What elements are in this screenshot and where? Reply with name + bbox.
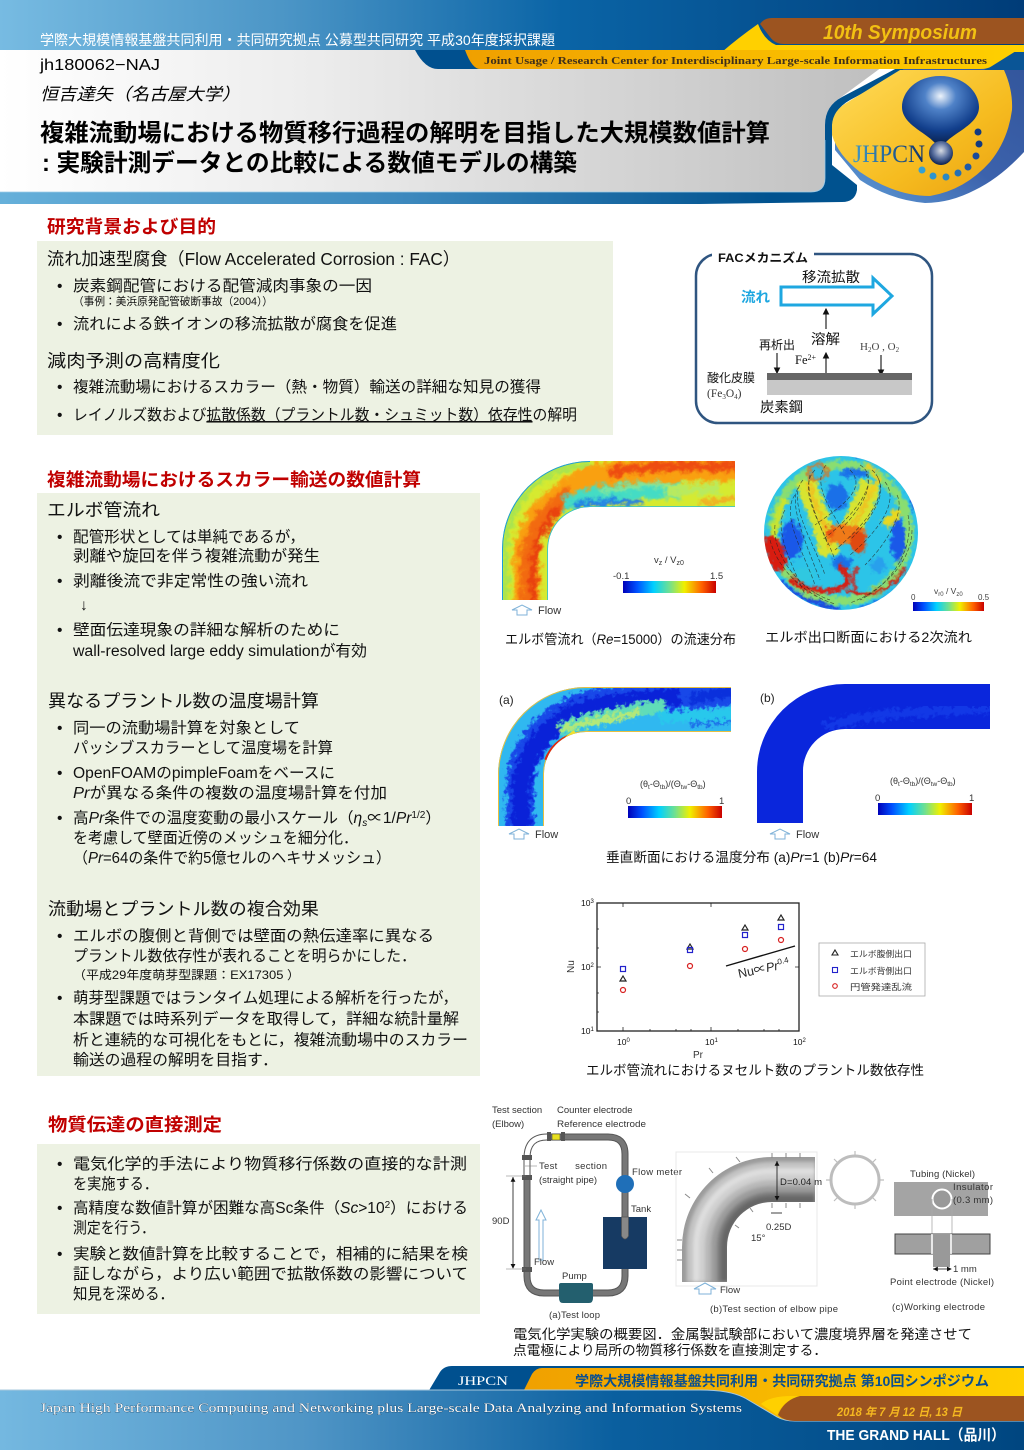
orange center bbox=[824, 524, 866, 544]
x axis labels: 10 bbox=[617, 1037, 626, 1047]
arrow: flow bbox=[781, 278, 892, 314]
Prandtl bullets bbox=[57, 718, 441, 867]
y axis labels: 2 bbox=[590, 963, 594, 969]
colorbar minimum: 0 bbox=[911, 593, 916, 602]
flanges bbox=[522, 1132, 565, 1272]
x axis title: Pr bbox=[693, 1050, 704, 1061]
dimension arrow bbox=[512, 1177, 514, 1268]
FAC bullets: （事例：美浜原発配管破断事故（2004）） bbox=[73, 294, 273, 308]
Prandtl bullets: ） bbox=[425, 810, 441, 827]
flow label: 流れ bbox=[741, 289, 770, 305]
y axis labels: 10 bbox=[581, 962, 590, 972]
Prandtl bullets: （Pr=64の条件で約5億セルのヘキサメッシュ） bbox=[73, 849, 391, 867]
y axis labels: 3 bbox=[590, 899, 594, 905]
dissolution label: 溶解 bbox=[811, 331, 840, 347]
subheading: combined effect: 流動場とプラントル数の複合効果 bbox=[48, 899, 319, 919]
flow label: Flow bbox=[720, 1285, 740, 1296]
combined effect bullets: エルボの腹側と背側では壁面の熱伝達率に異なる bbox=[73, 927, 434, 945]
subheading: FAC: 流れ加速型腐食（Flow Accelerated Corrosion : FAC） bbox=[47, 249, 460, 269]
FAC mechanism diagram bbox=[696, 248, 932, 423]
prediction bullets bbox=[57, 378, 577, 424]
FAC bullets: • bbox=[57, 316, 62, 333]
oxygen label: H bbox=[860, 341, 868, 353]
arrow: reprecipitation down bbox=[776, 353, 778, 373]
FAC bullets: 流れによる鉄イオンの移流拡散が腐食を促進 bbox=[73, 315, 397, 333]
legend triangle row: エルボ腹側出口 bbox=[850, 949, 912, 959]
combined effect bullets: 析と連続的な可視化をもとに，複雑流動場中のスカラー bbox=[73, 1031, 468, 1049]
tank inlet bbox=[622, 1217, 628, 1239]
mass transfer bullets: • bbox=[57, 1200, 62, 1217]
elbow bullets: • bbox=[57, 573, 62, 590]
scatter chart: Nu vs Pr bbox=[566, 898, 806, 1061]
mass transfer bullets: 電気化学的手法により物質移行係数の直接的な計測 bbox=[73, 1155, 467, 1173]
colorbar title: / V bbox=[662, 555, 677, 566]
diameter arrow bbox=[776, 1161, 778, 1200]
colorbar title: -Θ bbox=[900, 776, 910, 786]
pump bbox=[559, 1283, 593, 1303]
diameter label: D=0.04 m bbox=[780, 1177, 822, 1188]
venue: THE GRAND HALL（品川） bbox=[827, 1427, 1005, 1444]
y axis labels: 1 bbox=[590, 1027, 594, 1033]
rig labels: (straight pipe) bbox=[539, 1175, 597, 1186]
ribbon JHPCN: JHPCN bbox=[458, 1373, 509, 1388]
mass transfer bullets: 証しながら，より広い範囲で拡散係数の影響について bbox=[73, 1265, 468, 1283]
footer band bbox=[0, 1390, 1024, 1450]
velocity vectors bbox=[770, 465, 912, 604]
elbow bullets: ↓ bbox=[80, 597, 88, 614]
symposium label: 10th Symposium bbox=[823, 22, 977, 44]
carbon steel bbox=[767, 380, 912, 395]
y axis labels: 10 bbox=[581, 898, 590, 908]
temperature elbow b bbox=[757, 684, 990, 823]
legend square row: エルボ背側出口 bbox=[850, 966, 912, 976]
y axis labels: 10 bbox=[581, 1026, 590, 1036]
colorbar title: ) bbox=[703, 779, 706, 789]
heading: background and aim: 研究背景および目的 bbox=[47, 217, 216, 237]
prediction bullets: 複雑流動場におけるスカラー（熱・物質）輸送の詳細な知見の獲得 bbox=[73, 378, 541, 396]
rig labels: Counter electrode bbox=[557, 1105, 633, 1116]
elbow bullets: 壁面伝達現象の詳細な解析のために bbox=[73, 621, 340, 639]
flow arrow label: Flow bbox=[796, 829, 819, 841]
logo drop bbox=[902, 76, 979, 143]
electrode labels: Point electrode (Nickel) bbox=[890, 1277, 994, 1288]
combined effect bullets: （平成29年度萌芽型課題：EX17305 ） bbox=[73, 968, 300, 982]
flow meter bbox=[616, 1175, 634, 1193]
oxide label: 酸化皮膜 bbox=[707, 371, 755, 385]
mass transfer bullets: ）における bbox=[390, 1199, 468, 1217]
dimension extension lines bbox=[506, 1166, 537, 1269]
temperature caption: 垂直断面における温度分布 (a)Pr=1 (b)Pr=64 bbox=[606, 850, 877, 865]
colorbar title: tb bbox=[910, 781, 916, 788]
tank bbox=[603, 1217, 647, 1269]
footer date tab bbox=[761, 1396, 1024, 1421]
mass transfer bullets: 知見を深める． bbox=[73, 1285, 174, 1303]
project id: jh180062−NAJ bbox=[39, 57, 160, 74]
colorbar title: tb bbox=[947, 781, 953, 788]
tick marks bbox=[597, 903, 799, 1031]
section view bbox=[895, 1234, 990, 1254]
elbow bullets: 配管形状としては単純であるが， bbox=[73, 528, 305, 546]
flow arrow bbox=[694, 1283, 716, 1294]
square series bbox=[620, 924, 784, 972]
colorbar title: t bbox=[648, 784, 650, 791]
title: 複雑流動場における物質移行過程の解明を目指した大規模数値計算 bbox=[40, 120, 770, 147]
colorbar title: z0 bbox=[677, 560, 684, 567]
rig labels: Test section bbox=[539, 1161, 607, 1172]
panel: mass transfer bbox=[37, 1144, 480, 1314]
steel label: 炭素鋼 bbox=[760, 399, 803, 415]
secondary flow disc bbox=[764, 456, 918, 610]
triangle series bbox=[620, 915, 784, 981]
Prandtl bullets: 1/2 bbox=[411, 810, 426, 821]
Prandtl bullets: ∝1/ bbox=[367, 810, 397, 827]
width arrow bbox=[933, 1268, 951, 1270]
colorbar: temperature a bbox=[626, 779, 724, 818]
colorbar title: -Θ bbox=[650, 779, 660, 789]
mass transfer bullets: • bbox=[57, 1246, 62, 1263]
spacing arrow bbox=[771, 1212, 782, 1214]
y axis title: Nu bbox=[566, 960, 577, 973]
Prandtl bullets: 高Pr条件での温度変動の最小スケール（η bbox=[73, 810, 362, 827]
colorbar title: tb bbox=[660, 784, 666, 791]
date: 2018 年 7 月 12 日, 13 日 bbox=[836, 1406, 963, 1419]
circle series bbox=[620, 938, 784, 992]
experiment caption: 電気化学実験の概要図．金属製試験部において濃度境界層を発達させて bbox=[513, 1327, 972, 1342]
working electrode diagram bbox=[890, 1169, 994, 1313]
elbow test section bbox=[527, 1137, 547, 1178]
elbow bullets bbox=[57, 528, 367, 660]
elbow pipe shading bbox=[682, 1157, 815, 1282]
mass transfer bullets: 測定を行う． bbox=[73, 1219, 155, 1237]
colorbar maximum: 1.5 bbox=[710, 571, 723, 582]
x axis labels bbox=[617, 1037, 806, 1047]
electrode labels: (0.3 mm) bbox=[953, 1195, 993, 1206]
colorbar maximum: 1 bbox=[719, 796, 724, 807]
mass transfer bullets: 2 bbox=[385, 1200, 391, 1211]
chart legend bbox=[819, 943, 925, 996]
flow arrow label: Flow bbox=[535, 829, 558, 841]
author: 恒吉達矢（名古屋大学） bbox=[40, 85, 240, 104]
y axis labels bbox=[581, 898, 594, 1036]
arrow: oxygen down bbox=[880, 355, 882, 375]
insulator circle bbox=[932, 1190, 952, 1208]
velocity caption: エルボ管流れ（Re=15000）の流速分布 bbox=[505, 632, 736, 647]
prediction bullets: レイノルズ数および拡散係数（プラントル数・シュミット数）依存性の解明 bbox=[73, 406, 577, 424]
spacing label: 0.25D bbox=[766, 1222, 791, 1233]
heading: scalar transport: 複雑流動場におけるスカラー輸送の数値計算 bbox=[47, 469, 421, 490]
legend circle row: 円管発達乱流 bbox=[850, 982, 913, 992]
power law label: Nu∝Pr bbox=[737, 959, 780, 981]
power law label: 0.4 bbox=[777, 955, 790, 967]
x axis labels: 10 bbox=[705, 1037, 714, 1047]
flow arrow label: Flow bbox=[538, 605, 561, 617]
colorbar title: )/(Θ bbox=[665, 779, 681, 789]
logo panel bbox=[832, 68, 1024, 203]
colorbar title: )/(Θ bbox=[915, 776, 931, 786]
panel: numerical simulation bbox=[37, 493, 480, 1076]
combined effect bullets: 萌芽型課題ではランタイム処理による解析を行ったが， bbox=[73, 989, 458, 1007]
colorbar title: v bbox=[934, 586, 938, 596]
Prandtl bullets: Pr bbox=[396, 810, 412, 827]
joint usage ribbon bbox=[415, 46, 1024, 69]
advection label: 移流拡散 bbox=[802, 269, 860, 285]
header organisation line: 学際大規模情報基盤共同利用・共同研究拠点 公募型共同研究 平成30年度採択課題 bbox=[40, 32, 555, 48]
rig labels: Reference electrode bbox=[557, 1119, 646, 1130]
right blue corner bbox=[984, 44, 1024, 70]
yellow arms bbox=[806, 480, 830, 555]
Prandtl bullets: Prが異なる条件の複数の温度場計算を付加 bbox=[73, 783, 387, 802]
subheading: Prandtl: 異なるプラントル数の温度場計算 bbox=[48, 691, 319, 711]
rig labels: Test section bbox=[492, 1105, 542, 1116]
elbow test section diagram bbox=[672, 1150, 838, 1315]
experiment caption bbox=[513, 1327, 972, 1358]
secondary flow caption: エルボ出口断面における2次流れ bbox=[765, 630, 973, 645]
flow arrow 1 bbox=[512, 605, 561, 617]
green ring bbox=[773, 465, 909, 601]
iron ion label: 2+ bbox=[808, 353, 816, 362]
rig labels: Flow bbox=[534, 1257, 554, 1268]
flow arrow bbox=[536, 1210, 546, 1260]
experiment caption: 点電極により局所の物質移行係数を直接測定する． bbox=[513, 1343, 827, 1358]
elbow bullets: 剥離や旋回を伴う複雑流動が発生 bbox=[73, 547, 320, 565]
colorbar title: (θ bbox=[890, 776, 898, 786]
electrode labels bbox=[890, 1169, 994, 1313]
top right symposium tab bbox=[722, 18, 1024, 52]
formula label: ) bbox=[738, 388, 742, 400]
temperature elbow a bbox=[498, 687, 731, 826]
colorbar title: z0 bbox=[956, 592, 963, 598]
title bbox=[40, 120, 770, 177]
panel caption: (b)Test section of elbow pipe bbox=[710, 1304, 838, 1315]
electrode labels: 1 mm bbox=[953, 1264, 977, 1275]
subheading: elbow flow: エルボ管流れ bbox=[47, 500, 161, 520]
colorbar: temperature b bbox=[875, 776, 974, 815]
loop pipe bbox=[527, 1137, 625, 1293]
rig labels: 90D bbox=[492, 1216, 510, 1227]
colorbar: velocity bbox=[613, 555, 723, 593]
combined effect bullets: 輸送の過程の解明を目指す． bbox=[73, 1051, 278, 1069]
projection lines bbox=[932, 1199, 952, 1234]
header band bbox=[0, 0, 1024, 52]
Prandtl bullets: s bbox=[362, 818, 367, 829]
colorbar title: ) bbox=[953, 776, 956, 786]
colorbar title: z bbox=[659, 560, 663, 567]
panel: background bbox=[37, 241, 613, 435]
colorbar title: -Θ bbox=[937, 776, 947, 786]
elbow bullets: 剥離後流で非定常性の強い流れ bbox=[73, 572, 309, 590]
colorbar title: (θ bbox=[640, 779, 648, 789]
rig labels: (Elbow) bbox=[492, 1119, 524, 1130]
oxygen label: O , O bbox=[871, 341, 896, 353]
rig labels: Tank bbox=[631, 1204, 651, 1215]
electrode labels: Insulator bbox=[953, 1182, 993, 1193]
red wall arcs bbox=[764, 531, 790, 576]
Prandtl bullets: • bbox=[57, 765, 62, 782]
top loop bbox=[809, 464, 827, 480]
FAC bullets: • bbox=[57, 278, 62, 295]
formula label: 3 bbox=[722, 393, 726, 401]
logo text: JHPCN bbox=[853, 141, 925, 168]
FAC bullets: 炭素鋼配管における配管減肉事象の一因 bbox=[73, 277, 372, 295]
electrode bbox=[552, 1134, 560, 1140]
mass transfer bullets: 高精度な数値計算が困難な高Sc条件（Sc>10 bbox=[73, 1200, 385, 1217]
measurement ports bbox=[677, 1153, 800, 1260]
Prandtl bullets: を考慮して壁面近傍のメッシュを細分化． bbox=[73, 829, 358, 847]
oxygen label: 2 bbox=[868, 346, 872, 354]
elbow bullets: • bbox=[57, 622, 62, 639]
colorbar title: r0 bbox=[938, 592, 944, 598]
formula label: O bbox=[726, 388, 734, 400]
x axis labels: 1 bbox=[714, 1038, 718, 1044]
FAC bullets bbox=[57, 277, 397, 333]
flow arrow 2 bbox=[509, 829, 558, 841]
formula label: (Fe bbox=[707, 388, 722, 400]
combined effect bullets: • bbox=[57, 990, 62, 1007]
x axis labels: 2 bbox=[802, 1038, 806, 1044]
colorbar minimum: 0 bbox=[875, 793, 880, 804]
tubing rectangle bbox=[894, 1182, 988, 1216]
power law line bbox=[726, 946, 795, 966]
rig labels: Flow meter bbox=[632, 1167, 682, 1178]
x axis labels: 10 bbox=[793, 1037, 802, 1047]
colorbar minimum: 0 bbox=[626, 796, 631, 807]
colorbar title: v bbox=[654, 555, 659, 566]
ribbon text: Joint Usage / Research Center for Interdisciplinary Large-scale Information Infrastructures bbox=[484, 55, 988, 67]
colorbar minimum: -0.1 bbox=[613, 571, 629, 582]
logo small ball bbox=[929, 141, 953, 165]
electrode labels: Tubing (Nickel) bbox=[910, 1169, 975, 1180]
iron ion label: Fe bbox=[795, 353, 808, 367]
panel label a: (a) bbox=[499, 693, 514, 707]
prediction bullets: • bbox=[57, 407, 62, 424]
pipe cross section ring bbox=[826, 1151, 884, 1209]
Prandtl bullets: パッシブスカラーとして温度場を計算 bbox=[73, 738, 333, 757]
rig labels bbox=[492, 1105, 682, 1321]
panel label b: (b) bbox=[760, 691, 775, 705]
panel corner highlight bbox=[0, 140, 825, 192]
flow arrow 3 bbox=[770, 829, 819, 841]
oxygen label: 2 bbox=[896, 346, 900, 354]
test loop diagram bbox=[492, 1105, 682, 1321]
colorbar: secondary flow bbox=[911, 586, 990, 611]
colorbar title: tw bbox=[681, 784, 688, 791]
colorbar maximum: 1 bbox=[969, 793, 974, 804]
Prandtl bullets: 同一の流動場計算を対象として bbox=[73, 718, 300, 737]
arrow: dissolution up bbox=[825, 309, 827, 329]
oxide film bbox=[767, 373, 912, 380]
chart caption: エルボ管流れにおけるヌセルト数のプラントル数依存性 bbox=[586, 1063, 924, 1078]
subheading: prediction: 減肉予測の高精度化 bbox=[47, 351, 220, 371]
angle label: 15° bbox=[751, 1233, 766, 1244]
colorbar title: tb bbox=[697, 784, 703, 791]
rig labels: Pump bbox=[562, 1271, 587, 1282]
prediction bullets: • bbox=[57, 379, 62, 396]
colorbar title: -Θ bbox=[687, 779, 697, 789]
reprecipitation label: 再析出 bbox=[759, 338, 795, 352]
heading: mass transfer: 物質伝達の直接測定 bbox=[48, 1115, 222, 1135]
electrode labels: (c)Working electrode bbox=[892, 1302, 985, 1313]
rig labels: (a)Test loop bbox=[549, 1310, 600, 1321]
colorbar title: tw bbox=[931, 781, 938, 788]
title: : 実験計測データとの比較による数値モデルの構築 bbox=[42, 149, 577, 177]
combined effect bullets: • bbox=[57, 928, 62, 945]
diagram title: FACメカニズム bbox=[718, 250, 808, 265]
combined effect bullets: プラントル数依存性が表れることを明らかにした． bbox=[73, 947, 416, 965]
elbow bullets: wall-resolved large eddy simulationが有効 bbox=[72, 642, 367, 660]
logo dots bbox=[918, 128, 982, 180]
colorbar title: t bbox=[898, 781, 900, 788]
mass transfer bullets: • bbox=[57, 1156, 62, 1173]
combined effect bullets bbox=[57, 927, 468, 1069]
footer text: Japan High Performance Computing and Networking plus Large-scale Data Analyzing and Information Systems bbox=[40, 1400, 742, 1415]
velocity field elbow bbox=[502, 461, 735, 600]
Prandtl bullets: OpenFOAMのpimpleFoamをベースに bbox=[73, 764, 335, 782]
combined effect bullets: 本課題では時系列データを取得して，詳細な統計量解 bbox=[73, 1009, 459, 1028]
formula label: 4 bbox=[734, 393, 738, 401]
mass transfer bullets bbox=[57, 1155, 469, 1303]
blue band under title bbox=[0, 68, 910, 204]
footer ribbon bbox=[428, 1366, 1024, 1424]
x axis labels: 0 bbox=[626, 1038, 630, 1044]
electrode stem bbox=[933, 1234, 950, 1267]
elbow bullets: • bbox=[57, 529, 62, 546]
ribbon symposium name: 学際大規模情報基盤共同利用・共同研究拠点 第10回シンポジウム bbox=[575, 1373, 989, 1389]
Prandtl bullets: • bbox=[57, 720, 62, 737]
gray title panel bbox=[0, 50, 905, 192]
mass transfer bullets: 実験と数値計算を比較することで，相補的に結果を検 bbox=[73, 1244, 469, 1263]
colorbar maximum: 0.5 bbox=[978, 593, 990, 602]
Prandtl bullets: • bbox=[57, 810, 62, 827]
colorbar title: / V bbox=[944, 586, 957, 596]
mass transfer bullets: を実施する． bbox=[73, 1175, 158, 1193]
arrow: iron ion up bbox=[825, 353, 827, 373]
